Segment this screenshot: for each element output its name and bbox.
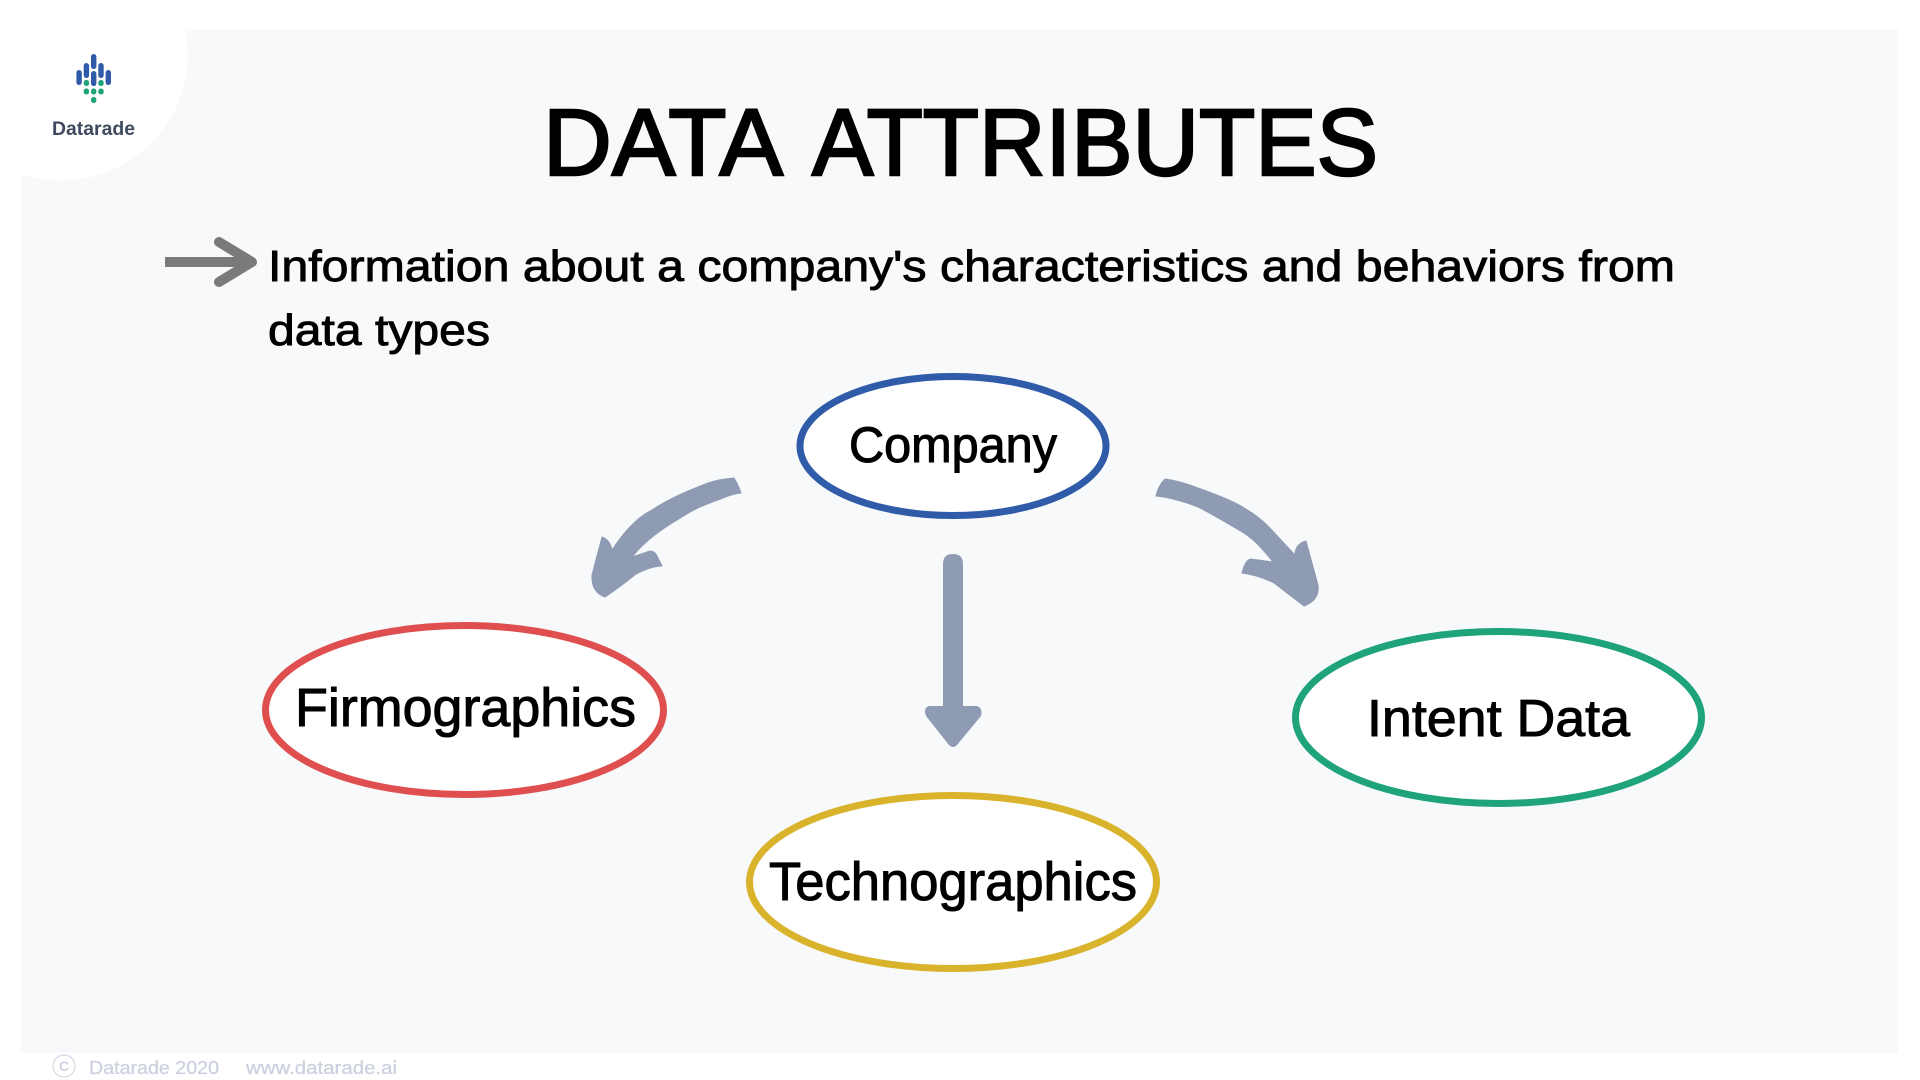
title	[543, 90, 1378, 196]
node: Firmographics	[266, 626, 664, 794]
footer	[53, 1055, 397, 1078]
node: Firmographics: Firmographics	[295, 678, 636, 738]
title: DATA	[543, 90, 784, 196]
icon: logo blue bars	[76, 54, 111, 86]
icon: copyright	[53, 1055, 75, 1077]
title: ATTRIBUTES	[812, 90, 1378, 196]
node: Company: Company	[849, 417, 1057, 473]
logo wordmark: Datarade	[52, 119, 135, 140]
description text: Information about a company's characteristics and behaviors from	[268, 242, 1675, 291]
node: Intent Data: Intent Data	[1367, 690, 1630, 748]
icon: copyright: C	[59, 1058, 69, 1074]
description text: data types	[268, 306, 490, 355]
icon: grey right arrow	[165, 242, 252, 282]
arrow: Company to Technographics	[925, 554, 982, 747]
icon: logo green dots	[84, 80, 104, 103]
node: Technographics	[750, 796, 1156, 968]
logo corner circle	[0, 0, 188, 180]
footer copyright text: Datarade 2020	[89, 1058, 219, 1078]
arrow: Company to Intent Data	[1156, 479, 1318, 606]
description text	[268, 242, 1675, 355]
logo: Datarade	[52, 54, 135, 140]
node: Company	[800, 376, 1106, 516]
footer website: www.datarade.ai	[245, 1058, 397, 1078]
node: Intent Data	[1296, 632, 1702, 804]
node: Technographics: Technographics	[769, 852, 1137, 912]
arrow: Company to Firmographics	[592, 478, 741, 597]
